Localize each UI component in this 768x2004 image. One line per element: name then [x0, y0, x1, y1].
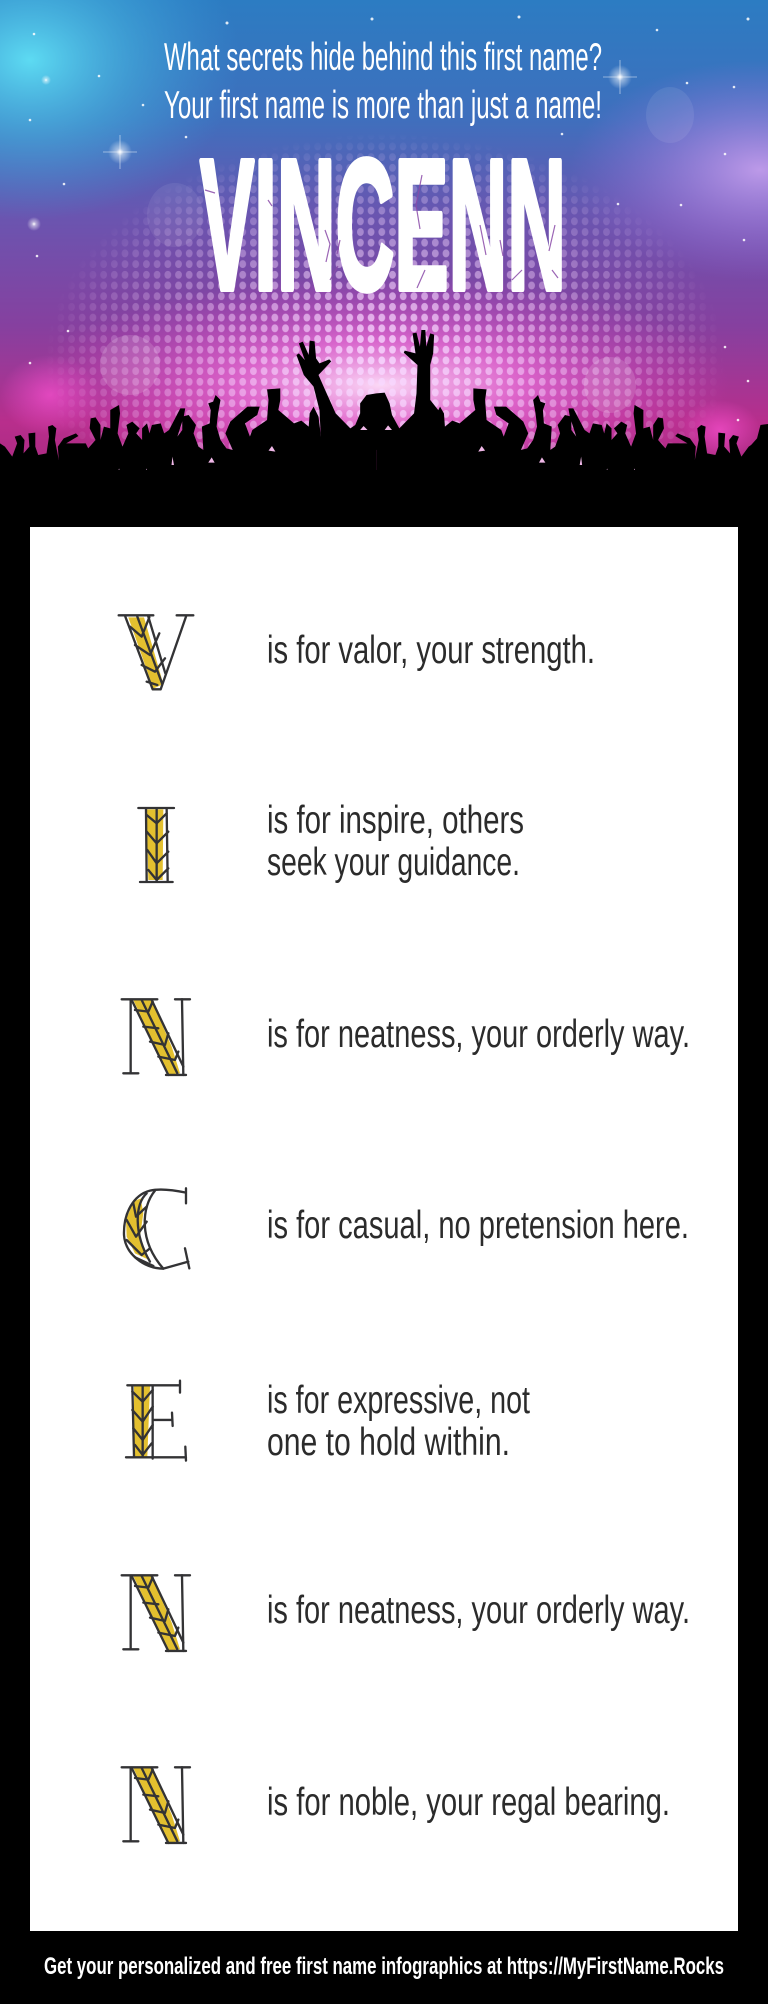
text: I: [267, 799, 524, 884]
sparkles: [27, 16, 750, 421]
text: I: is for inspire, others: [267, 799, 524, 842]
central figure with raised arms: [296, 330, 443, 450]
text: I: seek your guidance.: [267, 841, 520, 884]
row E: [126, 1379, 530, 1464]
row V: [119, 615, 595, 689]
row N third: [122, 1767, 670, 1843]
crowd silhouette: [0, 330, 768, 540]
text: E: [267, 1379, 530, 1464]
icon: letter N: [122, 1767, 190, 1843]
icon: letter N: [122, 1575, 190, 1651]
row I: [138, 799, 524, 884]
icon: letter N: [122, 999, 190, 1075]
header question text: [164, 36, 602, 127]
white content panel: [30, 527, 738, 1931]
text: V: is for valor, your strength.: [267, 629, 595, 672]
crowd left half: [0, 388, 377, 540]
crowd right edge: [750, 424, 768, 540]
icon: letter E: [126, 1381, 186, 1461]
text: E: one to hold within.: [267, 1421, 510, 1464]
icon: letter V: [119, 615, 193, 689]
icon: letter I: [138, 808, 174, 882]
row N: [122, 999, 690, 1075]
stage background with lights: [0, 0, 768, 520]
row C: [124, 1188, 689, 1269]
crowd right half: [377, 388, 754, 540]
text: E: is for expressive, not: [267, 1379, 530, 1422]
light gaps between figures: [17, 425, 736, 477]
lower black band: [0, 470, 768, 527]
row N second: [122, 1575, 690, 1651]
title: name: [200, 122, 566, 329]
icon: letter C: [124, 1188, 189, 1269]
